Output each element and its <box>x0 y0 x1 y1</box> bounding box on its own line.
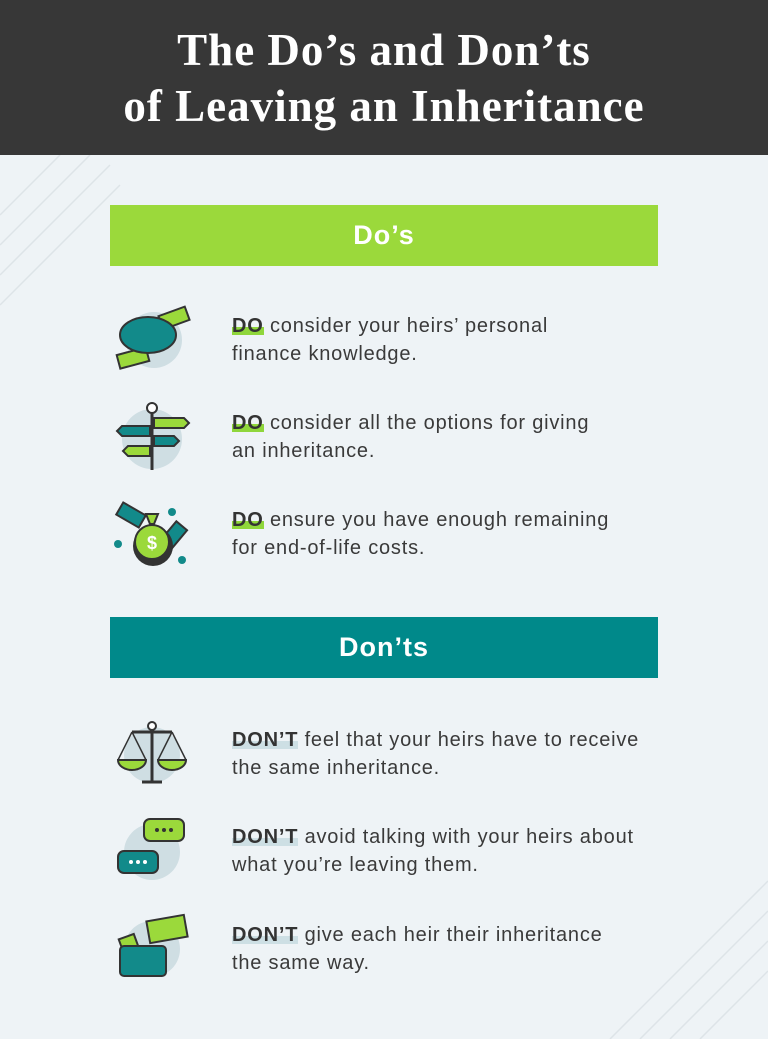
heading: Don'ts: Don’ts <box>339 632 429 662</box>
icon: brain money <box>116 305 191 370</box>
icon: wallet <box>118 914 189 977</box>
title: of Leaving an Inheritance <box>123 81 645 131</box>
title <box>0 0 768 155</box>
icon: money bag: $ <box>147 533 157 553</box>
text: dont 2: DON’T avoid talking with your heirs about <box>232 826 634 848</box>
text: do 1: finance knowledge. <box>232 343 418 365</box>
heading: Do's: Do’s <box>353 220 415 250</box>
text: dont 1 <box>232 729 639 779</box>
text: dont 1: DON’T feel that your heirs have to receive <box>232 729 639 751</box>
text: do 3: DO ensure you have enough remaining <box>232 509 609 531</box>
heading: Do's <box>110 205 658 266</box>
text: do 1 <box>232 315 548 365</box>
text: dont 3: the same way. <box>232 952 370 974</box>
text: dont 2 <box>232 826 634 876</box>
text: dont 2: what you’re leaving them. <box>232 854 479 876</box>
text: do 2: DO consider all the options for giving <box>232 412 589 434</box>
text: do 1: DO consider your heirs’ personal <box>232 315 548 337</box>
text: do 3: for end-of-life costs. <box>232 537 425 559</box>
text: do 2: an inheritance. <box>232 440 375 462</box>
text: dont 3: DON’T give each heir their inheritance <box>232 924 603 946</box>
icon: chat <box>117 818 185 880</box>
icon: signpost <box>116 402 190 470</box>
text: do 3 <box>232 509 609 559</box>
text: do 2 <box>232 412 589 462</box>
title: The Do’s and Don’ts <box>177 25 591 75</box>
heading: Don'ts <box>110 617 658 678</box>
text: dont 3 <box>232 924 603 974</box>
icon: money bag <box>114 501 188 566</box>
icon: scales <box>117 721 187 784</box>
text: dont 1: the same inheritance. <box>232 757 440 779</box>
